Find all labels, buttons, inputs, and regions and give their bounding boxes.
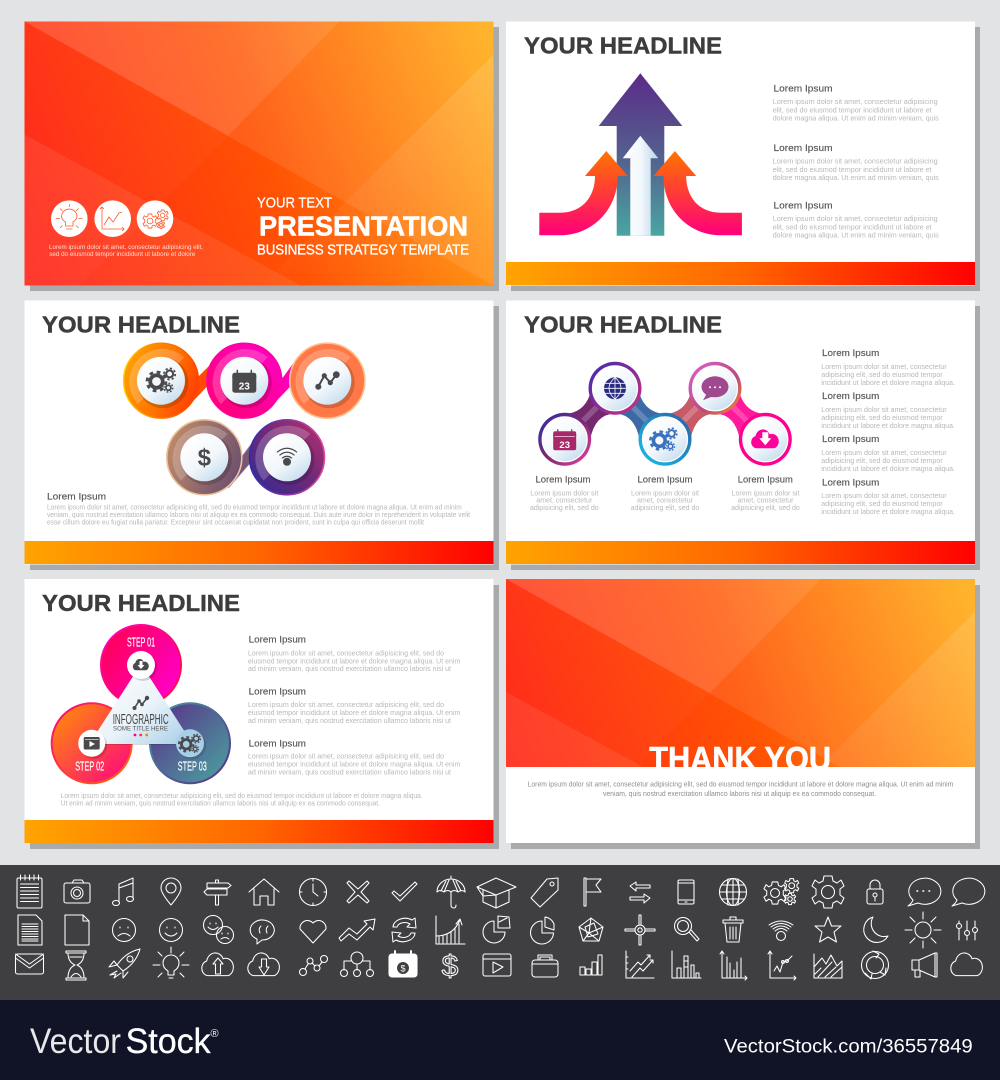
circle: wifi bbox=[250, 420, 324, 495]
right text column: Lorem Ipsum bbox=[822, 477, 879, 488]
icon: star bbox=[815, 917, 841, 942]
icon: clock bbox=[300, 878, 326, 906]
panel: linked circles slide bbox=[24, 300, 499, 570]
circle chain bottom row bbox=[167, 420, 324, 495]
cover title: PRESENTATION bbox=[259, 210, 468, 241]
icon: quote bubble bbox=[250, 920, 274, 944]
circle: dollar bbox=[167, 420, 242, 495]
icon: box bbox=[477, 878, 516, 908]
node: calendar: 23 bbox=[559, 440, 570, 451]
text block 2: eiusmod tempor incididunt ut labore et dolore magna aliqua. Ut enim bbox=[248, 708, 460, 717]
cover title bbox=[257, 195, 469, 258]
icon: dollar calendar bbox=[389, 951, 417, 977]
icon: lock bbox=[867, 880, 883, 904]
text block 2: Lorem ipsum dolor sit amet, consectetur adipisicing bbox=[773, 157, 938, 166]
icon: document lines bbox=[18, 915, 42, 945]
captions under nodes: Lorem ipsum dolor sit bbox=[732, 488, 800, 497]
icon: camera bbox=[64, 880, 90, 903]
logo bbox=[30, 1022, 219, 1061]
circle: dollar: $ bbox=[198, 444, 212, 471]
centre triangle bbox=[78, 651, 206, 760]
right text column: Lorem Ipsum bbox=[822, 434, 879, 445]
captions under nodes: adipisicing elit, sed do bbox=[530, 503, 599, 512]
icon: dollar calendar: $ bbox=[400, 964, 406, 974]
icon: speech dots bbox=[908, 878, 941, 906]
captions under nodes: amet, consectetur bbox=[637, 496, 694, 505]
heading: YOUR HEADLINE bbox=[42, 311, 240, 337]
right text column: adipisicing elit, sed do eiusmod tempor bbox=[821, 499, 943, 508]
three step diagram bbox=[52, 625, 230, 783]
circle: calendar: 23 bbox=[239, 382, 250, 393]
text block 3: ad minim veniam, quis nostrud exercitation ullamco laboris nisi ut bbox=[248, 767, 451, 776]
text block 2: ad minim veniam, quis nostrud exercitation ullamco laboris nisi ut bbox=[248, 716, 451, 725]
text block 1 bbox=[773, 83, 939, 122]
text block 2 bbox=[248, 686, 460, 725]
icon: gears bbox=[764, 879, 799, 905]
captions under nodes: amet, consectetur bbox=[536, 496, 593, 505]
icon: flag bbox=[584, 878, 601, 906]
text block 2 bbox=[773, 143, 939, 182]
icon: tag bbox=[531, 878, 558, 907]
text block: esse cillum dolore eu fugiat nulla pariatur. Excepteur sint occaecat cupidatat non proident, sunt in culpa qui officia deserunt mollit bbox=[47, 517, 424, 526]
text block 3: Lorem Ipsum bbox=[774, 200, 833, 211]
text block bbox=[47, 491, 470, 526]
circle: gears bbox=[124, 343, 198, 418]
text block 2: dolore magna aliqua. Ut enim ad minim veniam, quis bbox=[773, 173, 939, 182]
logo: ® bbox=[210, 1028, 219, 1040]
text block 3 bbox=[248, 738, 460, 776]
icon: magnifier bbox=[674, 918, 699, 941]
icon: pentagon radar bbox=[579, 918, 603, 941]
node: gears bbox=[638, 413, 692, 466]
heading: YOUR HEADLINE bbox=[42, 590, 240, 616]
icon: growth chart bbox=[436, 916, 465, 944]
icon: sliders bbox=[956, 921, 978, 940]
icon: cloud upload bbox=[202, 953, 233, 976]
panel: icon set bbox=[0, 865, 1000, 1000]
text block 1: dolore magna aliqua. Ut enim ad minim veniam, quis bbox=[773, 113, 939, 122]
step 03 circle: STEP 03 bbox=[178, 759, 207, 773]
text block: Lorem Ipsum bbox=[47, 491, 106, 502]
thank you text: veniam, quis nostrud exercitation ullamco laboris nisi ut aliquip ex ea commodo consequat. bbox=[603, 789, 876, 798]
icon: bars chart 3 bbox=[720, 951, 747, 980]
centre triangle: SOME TITLE HERE bbox=[113, 726, 168, 733]
icon: hourglass bbox=[66, 951, 86, 980]
captions under nodes: Lorem Ipsum bbox=[536, 475, 591, 486]
icon: blank document bbox=[65, 915, 89, 945]
icon: cloud bbox=[951, 953, 982, 976]
icon: video bbox=[483, 954, 511, 976]
icon: heart bbox=[300, 921, 326, 943]
text block 3: elit, sed do eiusmod tempor incididunt ut labore et bbox=[773, 222, 932, 231]
icon: pie chart bbox=[531, 917, 554, 944]
icon: mail bbox=[16, 954, 44, 974]
centre triangle: INFOGRAPHIC bbox=[113, 711, 169, 728]
panel: wave nodes slide bbox=[506, 300, 980, 570]
right text column: Lorem ipsum dolor sit amet, consectetur bbox=[821, 362, 947, 371]
right text column: Lorem ipsum dolor sit amet, consectetur bbox=[821, 448, 947, 457]
icon: area chart bbox=[814, 954, 842, 978]
logo: Stock bbox=[126, 1022, 211, 1061]
node: globe bbox=[588, 362, 642, 415]
right text column: incididunt ut labore et dolore magna aliqua. bbox=[821, 421, 955, 430]
footer: watermark band bbox=[0, 1000, 1000, 1080]
thank you text: Lorem ipsum dolor sit amet, consectetur adipisicing elit, sed do eiusmod tempor incididunt ut labore et dolore magna aliqua. Ut enim ad minim bbox=[528, 779, 953, 788]
icon: pie chart with photo bbox=[483, 916, 510, 943]
right text column: incididunt ut labore et dolore magna aliqua. bbox=[821, 378, 955, 387]
right text column: adipisicing elit, sed do eiusmod tempor bbox=[821, 456, 943, 465]
cover caption: sed do eiusmod tempor incididunt ut labore et dolore bbox=[49, 251, 195, 258]
text block 1: ad minim veniam, quis nostrud exercitation ullamco laboris nisi ut bbox=[248, 664, 451, 673]
text block: Lorem ipsum dolor sit amet, consectetur adipisicing elit, sed do eiusmod tempor incididunt ut labore et dolore magna aliqua. Ut enim ad minim bbox=[47, 502, 462, 511]
captions under nodes: adipisicing elit, sed do bbox=[731, 503, 800, 512]
cover title: YOUR TEXT bbox=[257, 195, 332, 211]
icon: megaphone bbox=[912, 953, 937, 977]
bottom note: Ut enim ad minim veniam, quis nostrud exercitation ullamco laboris nisi ut aliquip ex ea commodo consequat. bbox=[61, 799, 380, 808]
icon: check bbox=[392, 882, 417, 901]
captions under nodes bbox=[530, 475, 800, 512]
icon: bars bbox=[580, 955, 602, 975]
text block 1: Lorem ipsum dolor sit amet, consectetur adipisicing bbox=[773, 97, 938, 106]
step 03 circle bbox=[150, 703, 230, 783]
icon: close bbox=[347, 881, 369, 903]
icon: large gear bbox=[812, 876, 844, 908]
icon: speech bbox=[952, 878, 985, 906]
right text column: Lorem ipsum dolor sit amet, consectetur bbox=[821, 405, 947, 414]
heading: YOUR HEADLINE bbox=[524, 32, 722, 58]
cover caption bbox=[49, 244, 203, 258]
icon: bars chart 2 bbox=[672, 951, 701, 978]
panel: cover slide bbox=[24, 22, 499, 291]
icon: arrows bbox=[630, 882, 650, 903]
text block 2: Lorem ipsum dolor sit amet, consectetur adipisicing elit, sed do bbox=[248, 700, 444, 709]
right text column: incididunt ut labore et dolore magna aliqua. bbox=[821, 507, 955, 516]
bottom note: Lorem ipsum dolor sit amet, consectetur adipisicing elit, sed do eiusmod tempor incididunt ut labore et dolore magna aliqua. bbox=[61, 791, 423, 800]
right text column: adipisicing elit, sed do eiusmod tempor bbox=[821, 413, 943, 422]
icon: line chart bbox=[768, 951, 796, 980]
icon row 3 bbox=[16, 947, 982, 983]
circle: calendar bbox=[207, 343, 282, 418]
circle chain top row bbox=[124, 343, 365, 418]
right text column bbox=[821, 348, 955, 516]
icon: chart arrows bbox=[626, 951, 654, 978]
icon: globe bbox=[720, 878, 746, 906]
text block 3: Lorem Ipsum bbox=[249, 738, 306, 749]
icon: wifi bbox=[769, 921, 793, 940]
icon: sad face bbox=[112, 918, 136, 942]
step 01 circle: STEP 01 bbox=[127, 635, 155, 649]
icon: dollar: $ bbox=[442, 950, 459, 983]
icon: bulb bbox=[153, 947, 189, 978]
step 02 circle: STEP 02 bbox=[75, 759, 104, 773]
text block 1 bbox=[248, 635, 460, 673]
icon: moon bbox=[864, 917, 888, 942]
panel: three step slide bbox=[24, 579, 499, 849]
wave node diagram bbox=[538, 362, 792, 466]
icon: refresh bbox=[392, 918, 416, 942]
icon: hierarchy bbox=[340, 952, 374, 976]
icon: briefcase bbox=[532, 955, 558, 977]
cover title: BUSINESS STRATEGY TEMPLATE bbox=[257, 242, 469, 258]
text block 1: Lorem Ipsum bbox=[774, 83, 833, 94]
icon: notebook bbox=[17, 875, 42, 908]
text block 1: elit, sed do eiusmod tempor incididunt ut labore et bbox=[773, 105, 932, 114]
captions under nodes: Lorem Ipsum bbox=[638, 475, 693, 486]
captions under nodes: Lorem ipsum dolor sit bbox=[530, 488, 598, 497]
icon: sun bbox=[905, 912, 941, 948]
bottom note bbox=[61, 791, 423, 808]
arrows chart bbox=[539, 73, 742, 236]
icon: home bbox=[249, 879, 279, 905]
cover caption: Lorem ipsum dolor sit amet, consectetur adipisicing elit, bbox=[49, 244, 203, 251]
node: calendar bbox=[538, 413, 591, 466]
icon: trash bbox=[723, 917, 743, 942]
right text column: adipisicing elit, sed do eiusmod tempor bbox=[821, 370, 943, 379]
text block 2: elit, sed do eiusmod tempor incididunt ut labore et bbox=[773, 165, 932, 174]
text block: veniam, quis nostrud exercitation ullamco laboris nisi ut aliquip ex ea commodo consequat. Duis aute irure dolor in reprehenderit in voluptate velit bbox=[47, 510, 470, 519]
node: speech bubble bbox=[688, 362, 742, 415]
step 02 circle bbox=[52, 703, 132, 783]
icon row 1 bbox=[17, 875, 985, 908]
panel: arrows slide bbox=[506, 22, 980, 291]
text block 2: Lorem Ipsum bbox=[774, 143, 833, 154]
icon: two faces bbox=[204, 916, 234, 944]
icon row 2 bbox=[18, 912, 978, 948]
icon: trending arrow bbox=[339, 919, 375, 941]
icon: umbrella bbox=[437, 876, 465, 908]
icon row: bulb, chart, gears bbox=[51, 200, 173, 237]
text block 3: Lorem ipsum dolor sit amet, consectetur adipisicing bbox=[773, 214, 938, 223]
icon: rocket bbox=[109, 949, 140, 978]
icon: circle arrows bbox=[862, 951, 888, 979]
captions under nodes: Lorem ipsum dolor sit bbox=[631, 488, 699, 497]
text block 3: dolore magna aliqua. Ut enim ad minim veniam, quis bbox=[773, 230, 939, 239]
captions under nodes: Lorem Ipsum bbox=[738, 475, 793, 486]
right text column: Lorem Ipsum bbox=[822, 348, 879, 359]
captions under nodes: adipisicing elit, sed do bbox=[631, 503, 699, 512]
text block 1: eiusmod tempor incididunt ut labore et dolore magna aliqua. Ut enim bbox=[248, 656, 460, 665]
text block 1: Lorem ipsum dolor sit amet, consectetur adipisicing elit, sed do bbox=[248, 648, 444, 657]
right text column: incididunt ut labore et dolore magna aliqua. bbox=[821, 464, 955, 473]
icon: node line bbox=[300, 956, 328, 976]
heading: YOUR HEADLINE bbox=[524, 311, 722, 337]
icon: smile face bbox=[160, 918, 182, 942]
captions under nodes: amet, consectetur bbox=[738, 496, 794, 505]
circle: line graph bbox=[290, 343, 365, 418]
logo: Vector bbox=[30, 1022, 121, 1061]
text block 3: Lorem ipsum dolor sit amet, consectetur adipisicing elit, sed do bbox=[248, 752, 444, 761]
step 01 circle bbox=[101, 625, 181, 705]
icon: phone bbox=[678, 880, 694, 904]
text block 3 bbox=[773, 200, 939, 239]
text block 2: Lorem Ipsum bbox=[249, 686, 306, 697]
icon: pin bbox=[161, 878, 181, 905]
thank you text bbox=[528, 779, 953, 798]
text block 3: eiusmod tempor incididunt ut labore et dolore magna aliqua. Ut enim bbox=[248, 760, 460, 769]
icon: music bbox=[112, 878, 134, 906]
text block 1: Lorem Ipsum bbox=[249, 635, 306, 646]
icon: crosshair bbox=[625, 915, 655, 945]
icon: signpost bbox=[204, 880, 231, 905]
image id url: VectorStock.com/36557849 bbox=[724, 1036, 973, 1057]
right text column: Lorem Ipsum bbox=[822, 391, 879, 402]
right text column: Lorem ipsum dolor sit amet, consectetur bbox=[821, 491, 947, 500]
icon: cloud download bbox=[248, 953, 279, 976]
thank you title: THANK YOU bbox=[649, 740, 831, 777]
node: cloud download bbox=[739, 413, 792, 466]
panel: thank you slide bbox=[506, 579, 980, 849]
